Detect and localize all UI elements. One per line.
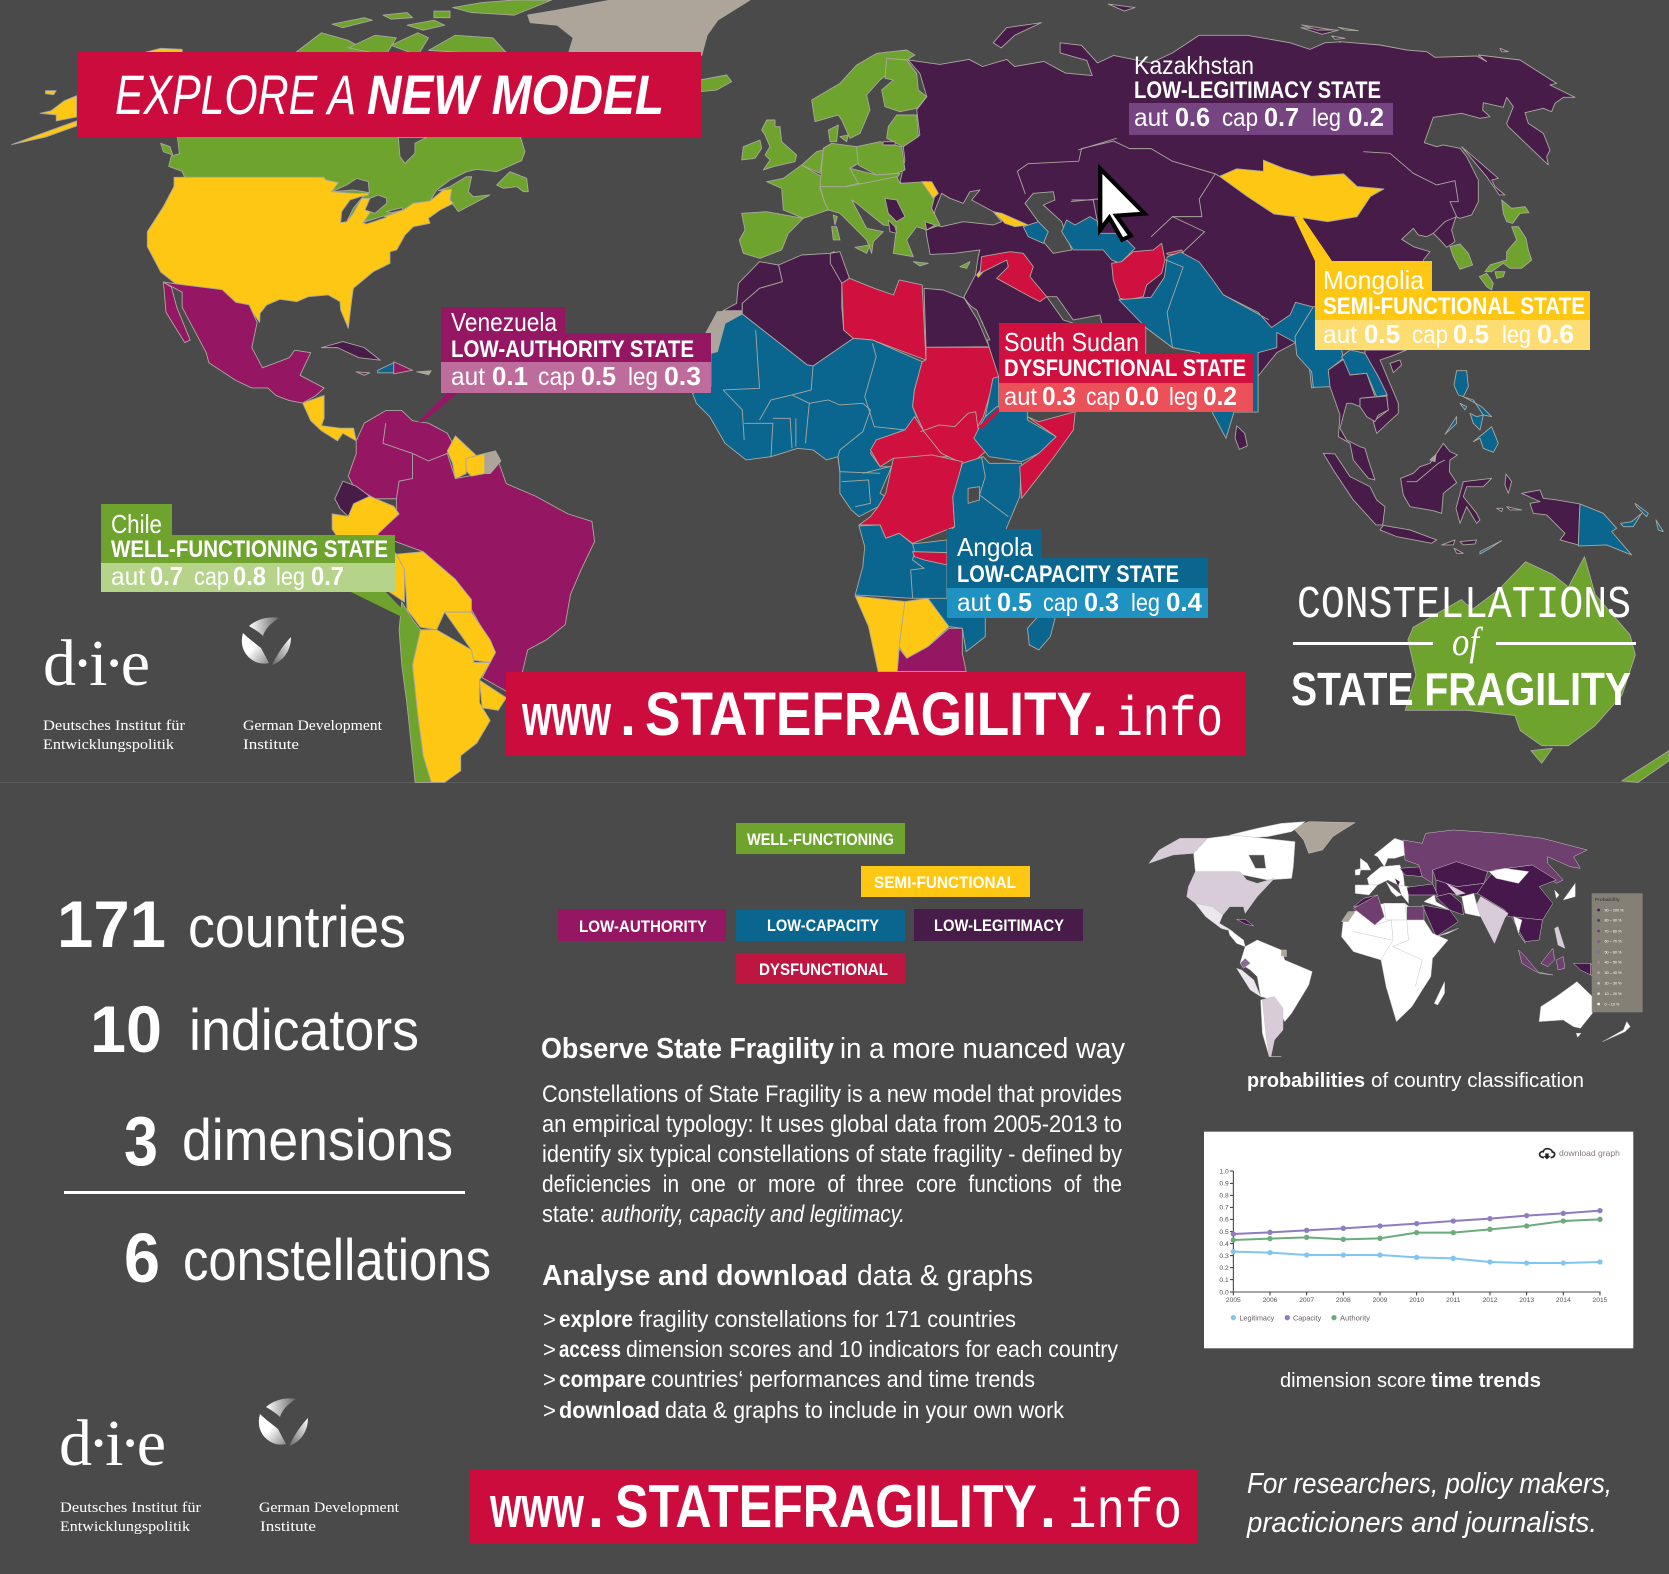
line chart: dimension score time trends: Authority xyxy=(1340,1313,1370,1322)
callout: Angola: 0.4 xyxy=(1166,587,1203,617)
text block: analyse and download: > xyxy=(543,1307,556,1332)
website banner bottom: . xyxy=(588,1475,604,1540)
legend chips: six constellations: LOW-LEGITIMACY xyxy=(934,917,1064,935)
icon: mouse cursor arrow xyxy=(1100,169,1145,240)
seam cover between map pieces xyxy=(1339,43,1342,263)
callout: Mongolia: Mongolia xyxy=(1323,265,1425,295)
callout: Angola: Angola xyxy=(957,532,1033,562)
callout: Venezuela: aut xyxy=(451,363,485,391)
line chart: dimension score time trends: 2007 xyxy=(1299,1297,1314,1304)
text block: observe state fragility: authority, capacity and legitimacy. xyxy=(601,1201,905,1228)
mini map probability legend: 30 – 40 % xyxy=(1604,971,1622,975)
line chart: dimension score time trends: 2006 xyxy=(1263,1297,1278,1304)
region: Southeast Asia and Indonesia xyxy=(1295,307,1663,555)
callout: Venezuela: 0.1 xyxy=(492,361,528,391)
line chart: dimension score time trends xyxy=(1204,1132,1633,1348)
text block: observe state fragility: in a more nuanced way xyxy=(840,1033,1125,1065)
callout: Kazakhstan: cap xyxy=(1222,104,1258,132)
line chart: dimension score time trends: 0.6 xyxy=(1219,1217,1229,1224)
line chart: dimension score time trends: 0.8 xyxy=(1219,1193,1229,1200)
callout: Kazakhstan: 0.7 xyxy=(1264,102,1299,132)
callout: Kazakhstan: Kazakhstan xyxy=(1134,52,1254,80)
tagline: For researchers, policy makers, xyxy=(1247,1468,1612,1500)
callout: Angola: leg xyxy=(1131,589,1160,617)
callout: Mongolia: 0.5 xyxy=(1364,319,1400,349)
mini map probability legend: 20 – 30 % xyxy=(1604,982,1622,986)
key figures: constellations xyxy=(183,1228,491,1293)
region: Eurasia low-legitimacy base xyxy=(900,4,1340,403)
website banner bottom: info xyxy=(1068,1480,1182,1544)
callout: Mongolia xyxy=(1315,261,1590,350)
legend chips: six constellations: LOW-AUTHORITY xyxy=(579,918,707,936)
mini map probability legend: 80 – 90 % xyxy=(1604,919,1622,923)
callout: Venezuela: 0.3 xyxy=(664,361,701,391)
text block: analyse and download: Analyse and download xyxy=(542,1260,848,1292)
text block: analyse and download: countries‘ performances and time trends xyxy=(651,1366,1035,1392)
line chart: dimension score time trends: 0.0 xyxy=(1219,1289,1229,1296)
line chart: dimension score time trends: 2008 xyxy=(1336,1297,1351,1304)
line chart: dimension score time trends: 2009 xyxy=(1373,1297,1388,1304)
region: Arctic, Alaska, Central and South America xyxy=(12,0,750,782)
region: Canada and United States xyxy=(147,130,528,328)
caption: time trends: dimension score xyxy=(1280,1369,1426,1392)
key figures: indicators xyxy=(189,998,419,1063)
callout: Venezuela: 0.5 xyxy=(581,361,616,391)
callout: Mongolia: 0.5 xyxy=(1453,319,1489,349)
callout: Mongolia: leg xyxy=(1502,321,1531,349)
callout: Kazakhstan: 0.2 xyxy=(1348,102,1384,132)
legend chips: six constellations: DYSFUNCTIONAL xyxy=(759,961,888,979)
caption: time trends xyxy=(1280,1369,1541,1392)
logo: German Development Institute top: Institute xyxy=(243,737,299,753)
logo: d.i.e bottom: Deutsches Institut für xyxy=(60,1500,201,1516)
callout: Kazakhstan: aut xyxy=(1134,104,1168,132)
mini map probability legend: 0 – 10 % xyxy=(1604,1002,1620,1006)
line chart: dimension score time trends: 2014 xyxy=(1556,1297,1571,1304)
line chart: dimension score time trends: 2012 xyxy=(1483,1297,1498,1304)
mini map probability legend: 90 – 100 % xyxy=(1604,908,1624,912)
text block: observe state fragility: Observe State Fragility xyxy=(541,1033,834,1065)
callout: Angola xyxy=(947,529,1208,618)
caption: probabilities: of country classification xyxy=(1371,1069,1584,1092)
caption: probabilities xyxy=(1247,1069,1584,1092)
text block: analyse and download: compare xyxy=(559,1366,646,1392)
tagline xyxy=(1246,1468,1612,1539)
callout: South Sudan: cap xyxy=(1086,383,1120,411)
logo: d.i.e top: Deutsches Institut für xyxy=(43,718,185,734)
callout: Chile: WELL-FUNCTIONING STATE xyxy=(111,536,388,563)
title banner: explore a new model xyxy=(77,52,701,137)
text block: analyse and download: data & graphs xyxy=(857,1260,1033,1292)
callout: Chile: aut xyxy=(111,563,145,591)
line chart: dimension score time trends: 0.2 xyxy=(1219,1265,1229,1272)
callout: Venezuela: LOW-AUTHORITY STATE xyxy=(451,336,694,363)
text block: observe state fragility xyxy=(541,1033,1125,1228)
logo: German Development Institute bottom: German Development xyxy=(259,1500,399,1516)
callout: Mongolia: aut xyxy=(1323,321,1357,349)
callout: Chile: cap xyxy=(194,563,229,591)
mini map probability legend: 50 – 60 % xyxy=(1604,950,1622,954)
heading: Constellations of State Fragility: of xyxy=(1452,619,1483,664)
text block: analyse and download: > xyxy=(543,1337,556,1362)
callout: Mongolia: 0.6 xyxy=(1537,319,1574,349)
callout: Angola: cap xyxy=(1043,589,1078,617)
key figures: 10 xyxy=(90,992,162,1066)
line chart: dimension score time trends: 2005 xyxy=(1226,1297,1241,1304)
legend chips: six constellations: LOW-CAPACITY xyxy=(767,917,879,935)
callout: Venezuela: cap xyxy=(538,363,575,391)
legend chips: six constellations: WELL-FUNCTIONING xyxy=(747,831,894,849)
mini map probability legend: 60 – 70 % xyxy=(1604,940,1622,944)
text block: analyse and download: fragility constellations for 171 countries xyxy=(639,1306,1016,1332)
callout: Kazakhstan: leg xyxy=(1312,104,1341,132)
logo: German Development Institute bottom xyxy=(259,1398,399,1535)
line chart: dimension score time trends: 0.5 xyxy=(1219,1229,1229,1236)
logo: German Development Institute top xyxy=(242,617,382,753)
text block: analyse and download: data & graphs to include in your own work xyxy=(665,1397,1064,1423)
website banner top: info xyxy=(1116,688,1223,752)
line chart: dimension score time trends: 0.4 xyxy=(1219,1241,1229,1248)
callout: South Sudan: leg xyxy=(1169,383,1198,411)
callout: South Sudan xyxy=(999,323,1253,412)
callout: South Sudan: 0.0 xyxy=(1125,381,1159,411)
text block: analyse and download: > xyxy=(543,1367,556,1392)
key figures: countries xyxy=(188,895,406,960)
callout: South Sudan: aut xyxy=(1004,383,1037,411)
line chart: dimension score time trends: 0.7 xyxy=(1219,1205,1229,1212)
text block: analyse and download: access xyxy=(559,1336,621,1362)
text block: observe state fragility: state: xyxy=(542,1201,595,1228)
text block: analyse and download: > xyxy=(543,1398,556,1423)
callout: Kazakhstan: 0.6 xyxy=(1175,102,1210,132)
logo: d.i.e bottom xyxy=(59,1407,201,1535)
text block: observe state fragility: identify six typical constellations of state fragility - defined by xyxy=(542,1141,1122,1168)
callout: Mongolia: cap xyxy=(1412,321,1448,349)
mini map probability legend: 70 – 80 % xyxy=(1604,929,1622,933)
caption: time trends: time trends xyxy=(1431,1369,1541,1392)
website banner top: STATEFRAGILITY xyxy=(645,680,1092,748)
line chart: dimension score time trends: 2011 xyxy=(1446,1297,1461,1304)
callout: Venezuela xyxy=(441,307,711,393)
callout: Chile: 0.7 xyxy=(311,561,344,591)
world map of state constellations xyxy=(12,0,1669,782)
text block: observe state fragility: deficiencies in one or more of three core functions of the xyxy=(542,1171,1122,1198)
logo: d.i.e bottom: Entwicklungspolitik xyxy=(60,1519,191,1535)
caption: probabilities: probabilities xyxy=(1247,1069,1365,1092)
website banner top: . xyxy=(1092,683,1108,748)
website banner top: www xyxy=(521,683,612,748)
title banner: explore a new model: EXPLORE A xyxy=(115,63,356,126)
line chart: dimension score time trends: 0.3 xyxy=(1219,1253,1229,1260)
text block: analyse and download xyxy=(542,1260,1118,1423)
key figures: dimensions xyxy=(182,1108,453,1173)
key figures: 6 xyxy=(124,1219,160,1297)
callout: Angola: LOW-CAPACITY STATE xyxy=(957,561,1179,588)
mini map probability legend xyxy=(1592,893,1643,1012)
text block: observe state fragility: Constellations of State Fragility is a new model that provides xyxy=(542,1081,1122,1108)
line chart: dimension score time trends: 2015 xyxy=(1593,1297,1608,1304)
callout: Kazakhstan xyxy=(1129,52,1393,135)
line chart: dimension score time trends: Legitimacy xyxy=(1239,1313,1274,1322)
logo: German Development Institute top: German Development xyxy=(243,718,382,734)
callout: Mongolia: SEMI-FUNCTIONAL STATE xyxy=(1323,293,1585,320)
line chart: dimension score time trends: Capacity xyxy=(1293,1313,1321,1322)
callout: Chile: 0.7 xyxy=(150,561,183,591)
website banner bottom xyxy=(469,1469,1198,1544)
website banner top: . xyxy=(620,683,636,748)
tagline: practicioners and journalists. xyxy=(1246,1507,1597,1539)
text block: analyse and download: dimension scores and 10 indicators for each country xyxy=(626,1336,1118,1362)
region: seas and Europe xyxy=(700,50,1183,340)
callout: South Sudan: South Sudan xyxy=(1004,327,1139,357)
logo: d.i.e bottom: d·i·e xyxy=(59,1407,166,1480)
probability mini map xyxy=(1149,822,1630,1057)
key figures: 171 xyxy=(57,887,166,961)
callout: Angola: 0.5 xyxy=(997,587,1032,617)
mini map probability legend: 40 – 50 % xyxy=(1604,961,1622,965)
logo: d.i.e top: d·i·e xyxy=(43,627,150,700)
text block: observe state fragility: an empirical typology: It uses global data from 2005-2013 to xyxy=(542,1111,1122,1138)
mini map probability legend: 10 – 20 % xyxy=(1604,992,1622,996)
callout: Angola: aut xyxy=(957,589,991,617)
line chart: dimension score time trends: 1.0 xyxy=(1219,1168,1229,1175)
website banner bottom: www xyxy=(489,1475,585,1540)
callout: South Sudan: 0.2 xyxy=(1203,381,1237,411)
callout: Chile xyxy=(101,504,395,592)
callout pointers xyxy=(351,217,1332,617)
callout: Venezuela: leg xyxy=(628,363,658,391)
text block: analyse and download: explore xyxy=(559,1306,633,1332)
callout: Kazakhstan: LOW-LEGITIMACY STATE xyxy=(1134,77,1381,104)
website banner bottom: STATEFRAGILITY xyxy=(615,1473,1037,1540)
legend chips: six constellations xyxy=(558,823,1083,984)
logo: German Development Institute bottom: Institute xyxy=(260,1519,316,1535)
website banner top xyxy=(506,672,1245,756)
heading: Constellations of State Fragility xyxy=(1291,580,1636,715)
logo: d.i.e top: Entwicklungspolitik xyxy=(43,737,175,753)
line chart: dimension score time trends: 0.9 xyxy=(1219,1181,1229,1188)
heading: Constellations of State Fragility: CONSTELLATIONS xyxy=(1297,580,1631,631)
callout: Chile: 0.8 xyxy=(233,561,266,591)
logo: d.i.e top xyxy=(43,627,185,753)
callout: South Sudan: DYSFUNCTIONAL STATE xyxy=(1004,355,1246,382)
legend chips: six constellations: SEMI-FUNCTIONAL xyxy=(874,874,1016,892)
line chart: dimension score time trends: 0.1 xyxy=(1219,1277,1229,1284)
callout: South Sudan: 0.3 xyxy=(1042,381,1076,411)
website banner bottom: . xyxy=(1040,1475,1056,1540)
callout: Chile: Chile xyxy=(111,509,162,539)
text block: analyse and download: download xyxy=(559,1397,660,1423)
key figures xyxy=(57,887,491,1297)
region: South Asia, Mongolia, Australia xyxy=(1119,160,1669,782)
title banner: explore a new model: NEW MODEL xyxy=(367,63,664,126)
line chart: dimension score time trends: 2010 xyxy=(1409,1297,1424,1304)
callout: Angola: 0.3 xyxy=(1084,587,1119,617)
mini map probability legend: Probability xyxy=(1595,897,1620,903)
callout: Venezuela: Venezuela xyxy=(451,307,557,337)
line chart: dimension score time trends: 2013 xyxy=(1519,1297,1534,1304)
region: Africa xyxy=(693,252,1075,672)
key figures: 3 xyxy=(124,1102,158,1180)
region: Far East Russia, Korea and Japan xyxy=(1302,25,1575,290)
line chart: dimension score time trends: download graph xyxy=(1559,1148,1620,1158)
callout: Chile: leg xyxy=(276,563,305,591)
